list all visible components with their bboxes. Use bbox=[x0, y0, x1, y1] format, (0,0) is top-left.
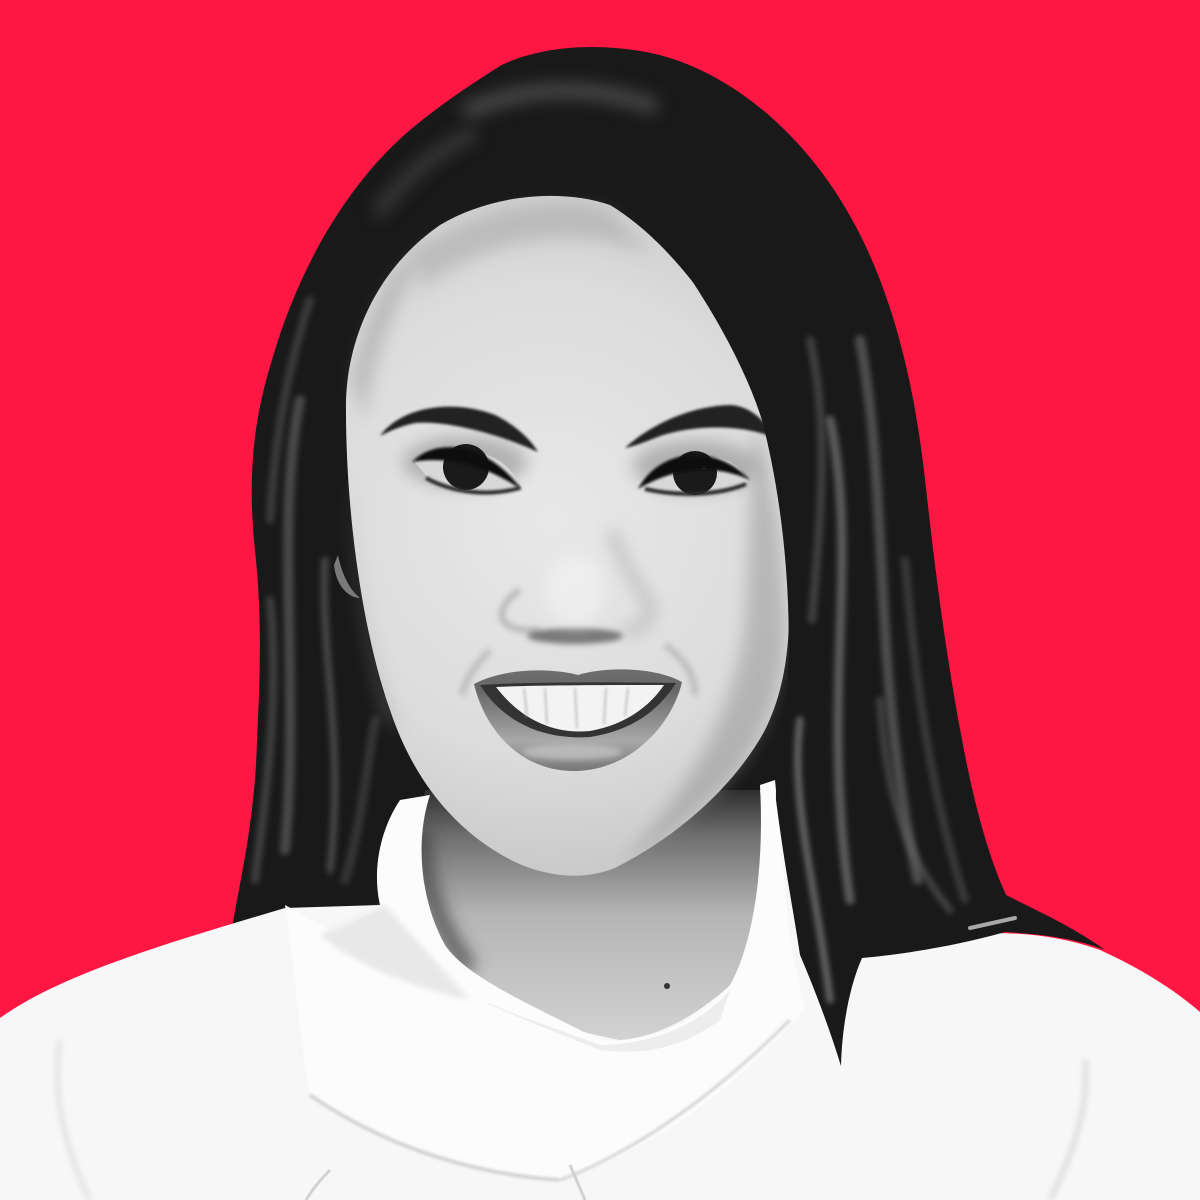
right eye bbox=[638, 451, 750, 495]
collar bbox=[285, 780, 805, 1200]
right eyebrow bbox=[625, 405, 774, 448]
beauty mark bbox=[664, 983, 670, 989]
face bbox=[346, 196, 789, 876]
clothing: white blouse bbox=[0, 790, 1200, 1200]
mouth bbox=[474, 669, 682, 771]
smile cheek creases bbox=[462, 645, 695, 695]
teeth bbox=[496, 685, 664, 732]
neck bbox=[421, 790, 775, 1040]
ear hint bbox=[334, 555, 360, 598]
face side shading bbox=[620, 420, 785, 865]
hair bbox=[232, 47, 1006, 960]
eye socket shadows bbox=[403, 436, 527, 488]
left eye bbox=[412, 444, 522, 493]
left eyebrow bbox=[380, 407, 538, 452]
front hair strand: right side bbox=[610, 164, 1105, 1066]
nose bbox=[502, 530, 650, 644]
hair highlights bbox=[255, 91, 650, 880]
